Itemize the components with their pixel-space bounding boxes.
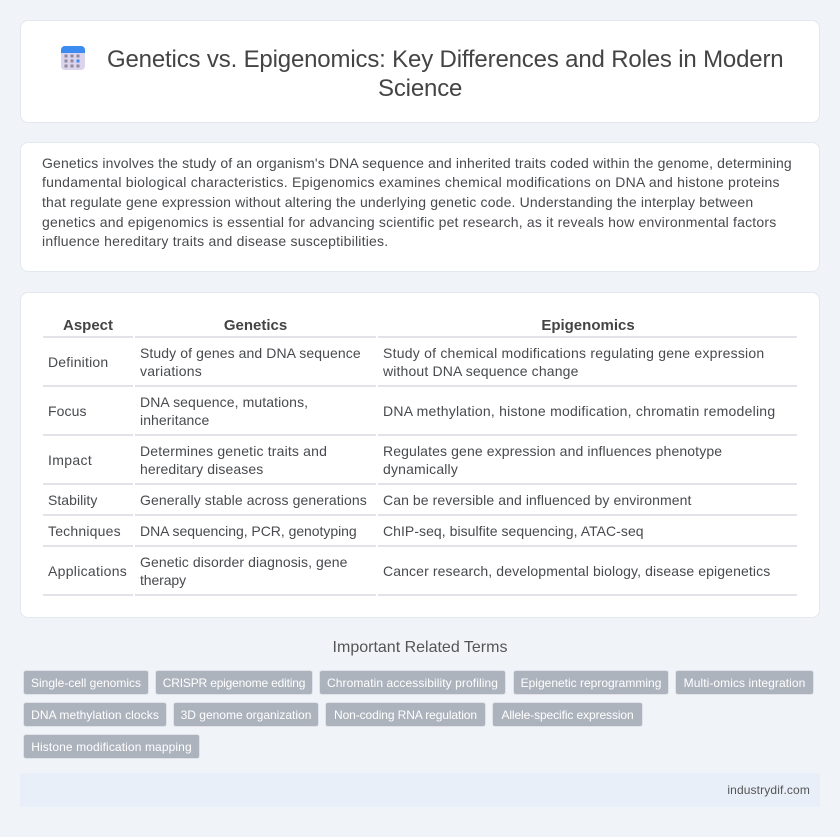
related term tags: Single-cell genomics — [31, 676, 141, 690]
table header: Aspect — [63, 317, 113, 334]
intro paragraph: genetics and epigenomics is essential for advancing scientific pet research, as it reveals how environmental factors — [42, 214, 776, 230]
row: Focus: DNA sequence, mutations, — [140, 394, 308, 410]
row: Impact — [48, 443, 722, 477]
related term tags: Non-coding RNA regulation — [334, 708, 477, 722]
table header — [63, 317, 635, 334]
row: Stability: Stability — [48, 492, 97, 508]
row: Applications — [48, 554, 770, 588]
row: Applications: Genetic disorder diagnosis, gene — [140, 554, 348, 570]
title — [107, 46, 784, 102]
footer bar — [20, 773, 820, 807]
row: Impact: hereditary diseases — [140, 461, 263, 477]
row: Techniques: ChIP-seq, bisulfite sequencing, ATAC-seq — [383, 523, 644, 539]
related term tags — [23, 670, 814, 759]
row: Impact: Impact — [48, 452, 92, 468]
related term tags: Histone modification mapping — [31, 740, 192, 754]
related terms heading: Important Related Terms — [333, 639, 507, 656]
row: Stability: Can be reversible and influenced by environment — [383, 492, 692, 508]
row: Applications: Cancer research, developmental biology, disease epigenetics — [383, 563, 770, 579]
intro paragraph: Genetics involves the study of an organism's DNA sequence and inherited traits coded within the genome, determining — [42, 155, 792, 171]
title: Science — [378, 75, 462, 102]
row: Techniques — [48, 523, 644, 539]
related term tags: 3D genome organization — [181, 708, 311, 722]
row: Applications: Applications — [48, 563, 127, 579]
related term tags: Multi-omics integration — [684, 676, 805, 690]
row: Focus — [48, 394, 775, 428]
table header: Genetics — [224, 317, 287, 334]
title: Genetics vs. Epigenomics: Key Differences and Roles in Modern — [107, 46, 784, 73]
related term tags: Epigenetic reprogramming — [521, 676, 661, 690]
related term tags: DNA methylation clocks — [31, 708, 159, 722]
row: Definition — [48, 345, 764, 379]
related term tags: Allele-specific expression — [501, 708, 634, 722]
row: Definition: Study of genes and DNA sequence — [140, 345, 361, 361]
row: Focus: Focus — [48, 403, 87, 419]
related term tags: Chromatin accessibility profiling — [327, 676, 498, 690]
row: Definition: Study of chemical modifications regulating gene expression — [383, 345, 764, 361]
header panel — [20, 20, 820, 123]
row: Impact: Determines genetic traits and — [140, 443, 327, 459]
intro paragraph: fundamental biological characteristics. Epigenomics examines chemical modifications on DNA and histone proteins — [42, 174, 780, 190]
row: Definition: without DNA sequence change — [383, 363, 579, 379]
footer source text: industrydif.com — [727, 783, 810, 797]
table header: Epigenomics — [541, 317, 635, 334]
row: Impact: Regulates gene expression and influences phenotype — [383, 443, 722, 459]
intro text panel — [20, 142, 820, 272]
intro paragraph — [42, 155, 792, 249]
comparison table panel — [20, 292, 820, 618]
intro paragraph: influence hereditary traits and disease susceptibilities. — [42, 233, 388, 249]
icon: calendar grid — [61, 46, 85, 70]
row: Definition: variations — [140, 363, 202, 379]
related term tags: CRISPR epigenome editing — [163, 676, 305, 690]
row: Impact: dynamically — [383, 461, 458, 477]
intro paragraph: that regulate gene expression without altering the underlying genetic code. Understanding the interplay between — [42, 194, 753, 210]
row: Focus: DNA methylation, histone modification, chromatin remodeling — [383, 403, 775, 419]
row: Applications: therapy — [140, 572, 186, 588]
row: Techniques: Techniques — [48, 523, 121, 539]
row: Techniques: DNA sequencing, PCR, genotyping — [140, 523, 357, 539]
row: Stability — [48, 492, 692, 508]
row: Focus: inheritance — [140, 412, 209, 428]
row: Definition: Definition — [48, 354, 108, 370]
row: Stability: Generally stable across generations — [140, 492, 367, 508]
